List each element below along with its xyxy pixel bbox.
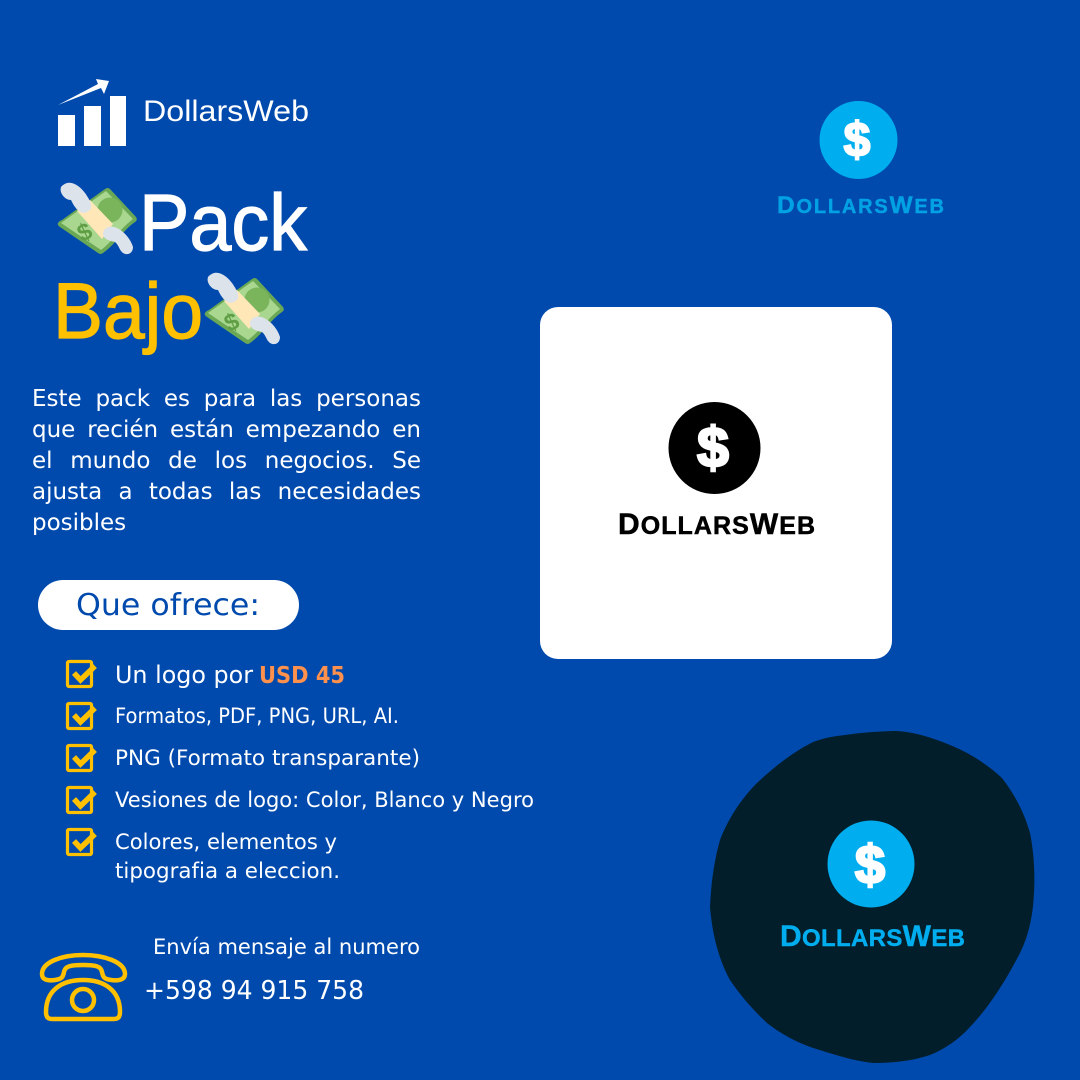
logo: black version: DOLLARSWEB [618,508,815,541]
brand header [58,79,309,146]
description text: que recién están empezando en [32,417,421,443]
item: logo versions: Vesiones de logo: Color, Blanco y Negro [115,788,534,812]
item: transparent PNG: PNG (Formato transparante) [115,746,420,770]
contact prompt: Envía mensaje al numero [153,935,420,959]
item: logo price: Un logo por [115,661,253,689]
pill heading: Que ofrece: Que ofrece: [76,588,260,623]
title word: Pack: Pack [139,178,308,267]
item: colours and type [68,830,340,883]
checklist [68,661,534,883]
panel: dark blob logo [710,731,1034,1063]
contact block [42,935,420,1019]
logo: blue on dark: DOLLARSWEB [780,920,965,953]
icon: telephone [42,955,125,1019]
phone number: +598 94 915 758 [144,976,364,1006]
icon: rising bar chart [58,79,126,146]
item: colours and type: tipografia a eleccion. [115,859,340,883]
description text: ajusta a todas las necesidades [32,479,421,505]
title word: Bajo: Bajo [53,266,203,355]
logo: blue on background: DOLLARSWEB [777,192,944,219]
pill heading: Que ofrece [38,580,299,630]
panel: white logo card [540,307,892,659]
logo: blue on dark [780,820,965,953]
logo: black version: $ [697,416,729,480]
description text: Este pack es para las personas [32,386,421,412]
description text [32,386,421,536]
icon: flying money left [58,183,137,254]
description text: el mundo de los negocios. Se [32,448,421,474]
description text: posibles [32,510,126,536]
logo: blue on background: $ [844,114,871,167]
item: formats: Formatos, PDF, PNG, URL, AI. [115,704,399,728]
logo: blue on background [777,101,944,219]
item: colours and type: Colores, elementos y [115,830,337,854]
item: logo price [68,661,345,689]
logo: black version [618,402,815,541]
logo: blue on dark: $ [855,835,885,895]
brand name: DollarsWeb [143,95,309,128]
item: logo price: USD 45 [259,663,345,689]
title [53,178,308,355]
icon: flying money right [205,273,284,344]
